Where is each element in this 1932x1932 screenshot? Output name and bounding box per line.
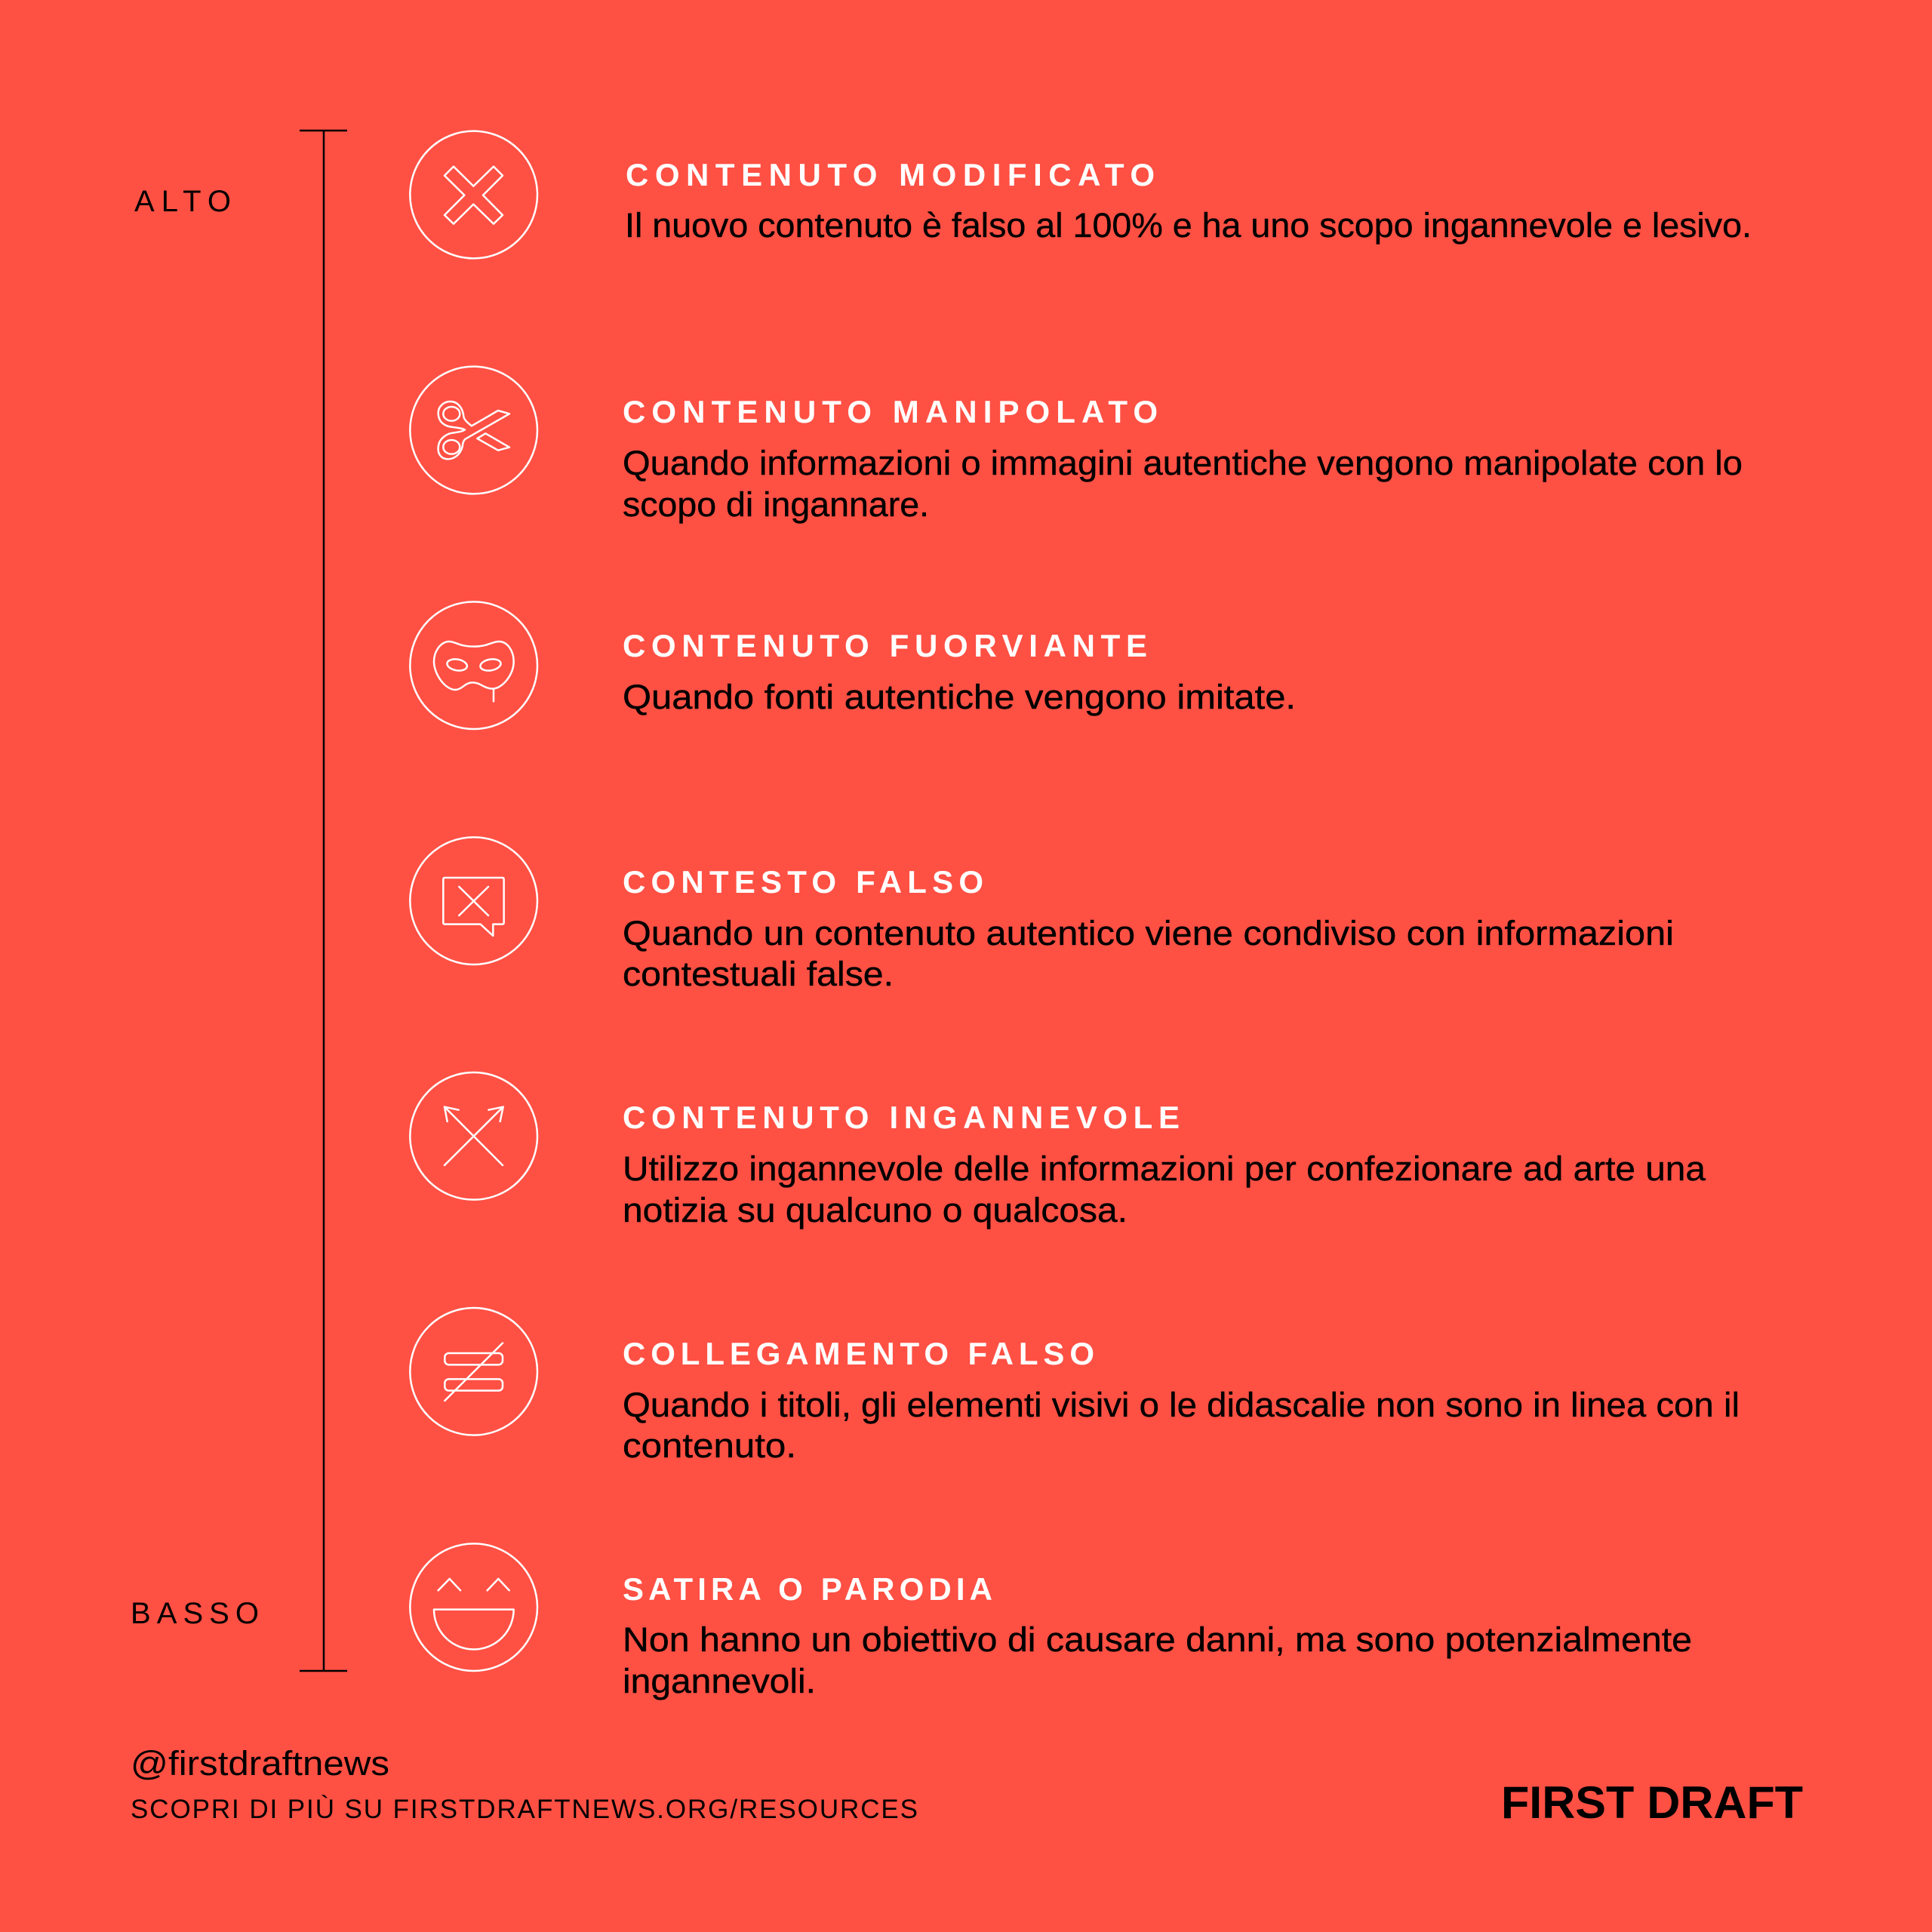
footer: resources link: SCOPRI DI PIÙ SU FIRSTDRAFTNEWS.ORG/RESOURCES — [131, 1795, 918, 1824]
heading: CONTENUTO INGANNEVOLE — [623, 1100, 1180, 1135]
panel: collegamento falso — [410, 1308, 1740, 1465]
heading: CONTESTO FALSO — [623, 864, 983, 900]
description: scopo di ingannare. — [623, 485, 929, 524]
heading: CONTENUTO MODIFICATO — [626, 157, 1155, 192]
description: Quando i titoli, gli elementi visivi o le didascalie non sono in linea con il — [623, 1386, 1740, 1424]
icon: speech bubble with cross — [410, 837, 537, 964]
description: Quando informazioni o immagini autentiche vengono manipolate con lo — [623, 444, 1743, 482]
footer: social handle: @firstdraftnews — [131, 1744, 389, 1783]
heading: CONTENUTO FUORVIANTE — [623, 628, 1147, 663]
label: basso: BASSO — [131, 1597, 259, 1630]
icon: mask — [410, 601, 537, 729]
severity scale — [131, 131, 347, 1671]
description — [623, 1386, 1740, 1465]
description — [623, 1149, 1706, 1229]
description: notizia su qualcuno o qualcosa. — [623, 1191, 1128, 1229]
label: alto: ALTO — [134, 185, 231, 218]
icon: crossing arrows — [410, 1072, 537, 1200]
icon: scissors — [410, 367, 537, 494]
icon: laughing face — [410, 1543, 537, 1671]
description: Il nuovo contenuto è falso al 100% e ha uno scopo ingannevole e lesivo. — [625, 206, 1752, 245]
icon: not equal — [410, 1308, 537, 1435]
panel: satira o parodia — [410, 1543, 1692, 1700]
panel: contenuto modificato — [410, 131, 1752, 258]
heading: CONTENUTO MANIPOLATO — [623, 394, 1158, 429]
description — [623, 1620, 1692, 1700]
panel: contenuto manipolato — [410, 367, 1743, 524]
description — [623, 444, 1743, 524]
panel: contenuto ingannevole — [410, 1072, 1706, 1229]
description — [623, 914, 1674, 993]
heading: SATIRA O PARODIA — [623, 1571, 992, 1607]
description: Quando un contenuto autentico viene condiviso con informazioni — [623, 914, 1674, 952]
panel: contesto falso — [410, 837, 1674, 993]
description: Utilizzo ingannevole delle informazioni per confezionare ad arte una — [623, 1149, 1706, 1188]
description: Non hanno un obiettivo di causare danni, ma sono potenzialmente — [623, 1620, 1692, 1659]
panel: contenuto fuorviante — [410, 601, 1296, 729]
logo: first draft: FIRST DRAFT — [1501, 1777, 1803, 1828]
heading: COLLEGAMENTO FALSO — [623, 1336, 1094, 1371]
description: ingannevoli. — [623, 1662, 816, 1700]
description: Quando fonti autentiche vengono imitate. — [623, 678, 1296, 716]
description: contestuali false. — [623, 955, 894, 993]
scale axis — [300, 131, 347, 1671]
icon: cross — [410, 131, 537, 258]
description: contenuto. — [623, 1426, 796, 1465]
